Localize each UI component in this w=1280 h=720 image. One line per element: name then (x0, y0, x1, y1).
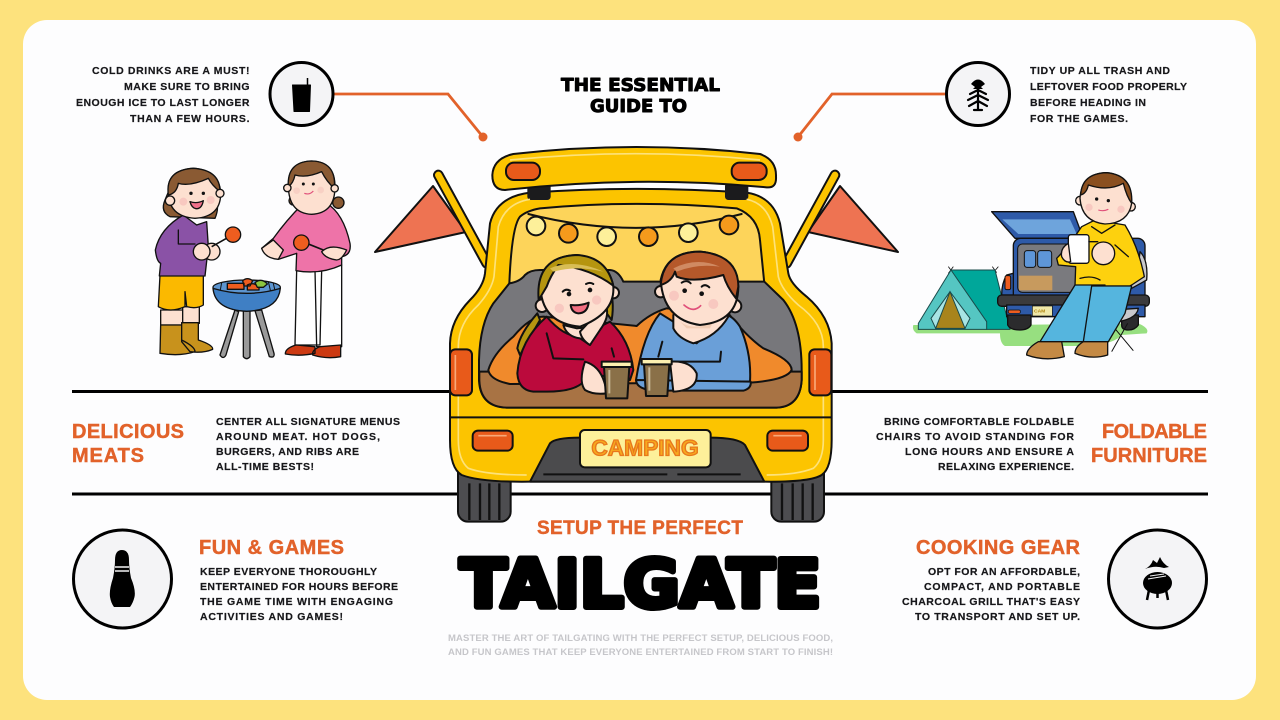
charcoal grill (213, 279, 280, 359)
section: foldable furniture: FOLDABLE (1102, 421, 1207, 443)
section: fun and games (199, 537, 398, 623)
girl with purple sweater (155, 168, 241, 355)
boy (636, 252, 751, 392)
section: delicious meats: AROUND MEAT. HOT DOGS, (216, 431, 380, 443)
trunk interior (479, 270, 802, 408)
body highlight (458, 199, 823, 475)
text: cold drinks: ENOUGH ICE TO LAST LONGER (76, 97, 250, 109)
section: delicious meats: BURGERS, AND RIBS ARE (216, 446, 359, 458)
spoiler hinges (527, 183, 748, 200)
blue SUV (992, 212, 1149, 330)
left flag (375, 175, 487, 263)
connector: trash to car (794, 94, 945, 142)
text: tidy up: FOR THE GAMES. (1030, 113, 1128, 125)
girl (517, 255, 633, 394)
text: cold drinks: THAN A FEW HOURS. (130, 113, 250, 125)
trunk floor (479, 372, 802, 408)
side tail lights (450, 349, 831, 395)
section: delicious meats: DELICIOUS (72, 421, 184, 443)
main title: tailgate: TAILGATE (460, 546, 821, 623)
description text: AND FUN GAMES THAT KEEP EVERYONE ENTERTAINED FROM START TO FINISH! (448, 647, 833, 658)
subtitle: setup the perfect: SETUP THE PERFECT (537, 518, 743, 539)
section: delicious meats: CENTER ALL SIGNATURE MENUS (216, 416, 400, 428)
section: foldable furniture: LONG HOURS AND ENSURE A (905, 446, 1074, 458)
heading: the essential guide to: GUIDE TO (590, 96, 687, 117)
description text (448, 633, 833, 658)
section: cooking gear (902, 537, 1081, 623)
tailgate crease (450, 414, 832, 420)
section: cooking gear: OPT FOR AN AFFORDABLE, (928, 566, 1080, 578)
description text: MASTER THE ART OF TAILGATING WITH THE PERFECT SETUP, DELICIOUS FOOD, (448, 633, 833, 644)
section: fun and games: ACTIVITIES AND GAMES! (200, 611, 343, 623)
folding chair (1073, 252, 1147, 352)
section: fun and games: THE GAME TIME WITH ENGAGING (200, 596, 393, 608)
girl with pink sweater (262, 161, 350, 358)
car body (450, 189, 832, 482)
section: foldable furniture: BRING COMFORTABLE FOLDABLE (884, 416, 1074, 428)
section: delicious meats (72, 416, 400, 473)
text: cold drinks: MAKE SURE TO BRING (124, 81, 250, 93)
heading: the essential guide to (561, 75, 720, 117)
illustration: friends grilling (155, 161, 350, 359)
blue SUV: CAM (1034, 309, 1045, 315)
section: cooking gear: CHARCOAL GRILL THAT'S EASY (902, 596, 1080, 608)
tent (918, 267, 1010, 329)
illustration: yellow car with open trunk (375, 147, 898, 522)
text: tidy up: LEFTOVER FOOD PROPERLY (1030, 81, 1187, 93)
orange blanket (488, 308, 792, 384)
text: tidy up (1030, 65, 1187, 125)
rear wheels (458, 460, 824, 522)
section: fun and games: ENTERTAINED FOR HOURS BEFORE (200, 581, 398, 593)
icon: charcoal grill (1108, 530, 1206, 628)
icon: pine tree (946, 62, 1010, 126)
license plate: CAMPING (591, 436, 699, 461)
section: cooking gear: COMPACT, AND PORTABLE (924, 581, 1080, 593)
icon: bowling pin (74, 530, 172, 628)
grass (913, 323, 1147, 346)
section: delicious meats: ALL-TIME BESTS! (216, 461, 314, 473)
icon: cold drink (270, 62, 333, 126)
coffee cups (602, 359, 672, 398)
section: foldable furniture: FURNITURE (1091, 445, 1207, 467)
text: tidy up: BEFORE HEADING IN (1030, 97, 1146, 109)
section: cooking gear: TO TRANSPORT AND SET UP. (915, 611, 1080, 623)
right flag (787, 175, 898, 263)
section: fun and games: KEEP EVERYONE THOROUGHLY (200, 566, 377, 578)
section: foldable furniture: RELAXING EXPERIENCE. (938, 461, 1074, 473)
section: delicious meats: MEATS (72, 445, 144, 467)
license plate (580, 430, 711, 467)
spoiler (492, 147, 776, 190)
text: tidy up: TIDY UP ALL TRASH AND (1030, 65, 1170, 77)
seated man (1027, 173, 1144, 359)
trunk opening upper panel (509, 204, 764, 283)
string lights (527, 214, 742, 246)
connector: drinks to car (333, 94, 488, 142)
rear bumper (530, 438, 764, 482)
text: cold drinks (76, 65, 250, 125)
section: fun and games: FUN & GAMES (199, 537, 344, 559)
section: foldable furniture: CHAIRS TO AVOID STANDING FOR (876, 431, 1074, 443)
section: foldable furniture (876, 416, 1207, 473)
text: cold drinks: COLD DRINKS ARE A MUST! (92, 65, 250, 77)
heading: the essential guide to: THE ESSENTIAL (561, 75, 720, 96)
illustration: man on folding chair with tent and SUV (913, 173, 1149, 359)
section: cooking gear: COOKING GEAR (916, 537, 1081, 559)
rear lights (473, 431, 808, 451)
